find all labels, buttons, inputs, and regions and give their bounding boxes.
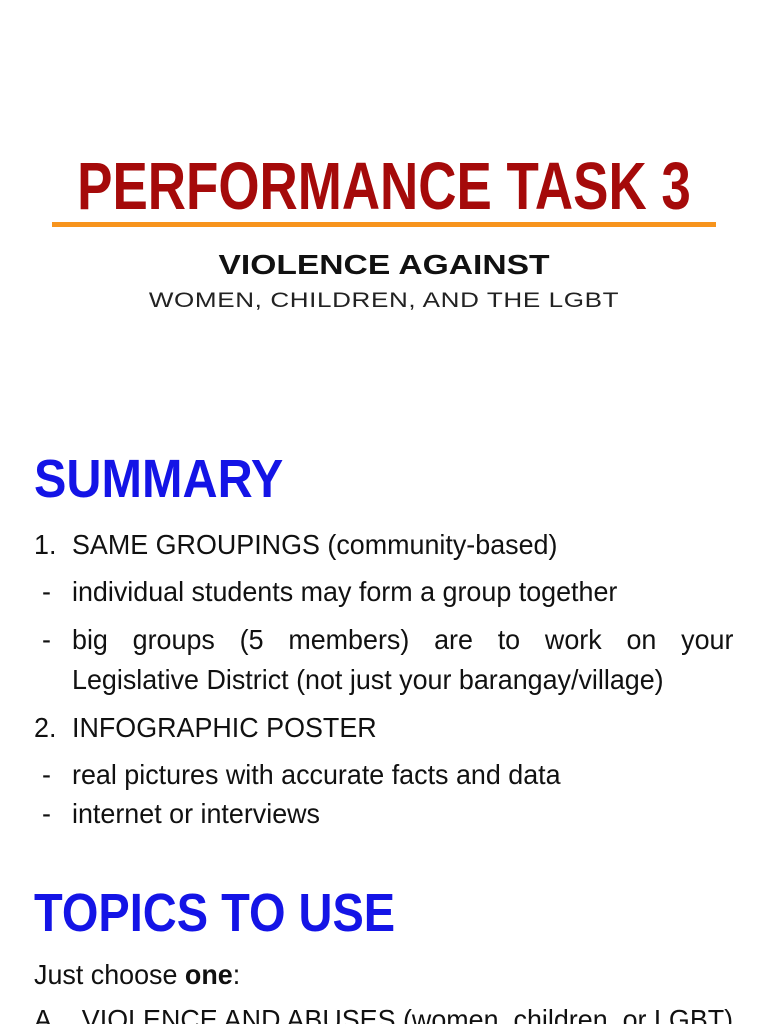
summary list: 2. (34, 712, 56, 743)
summary list: Legislative District (not just your barangay/village) (72, 664, 664, 695)
summary list (34, 529, 733, 829)
summary list: (5 (240, 624, 264, 655)
summary list: individual students may form a group together (72, 576, 617, 607)
subtitle: VIOLENCE AGAINST (218, 249, 550, 280)
heading: topics to use: TOPICS TO USE (34, 883, 395, 943)
summary list: your (681, 624, 733, 655)
summary list: - (42, 759, 51, 790)
summary list: internet or interviews (72, 798, 320, 829)
summary list: to (498, 624, 520, 655)
topics text (34, 959, 733, 1024)
summary list: - (42, 624, 51, 655)
summary list: groups (133, 624, 215, 655)
summary list: are (434, 624, 473, 655)
summary list: - (42, 798, 51, 829)
summary list: on (626, 624, 656, 655)
topics text: Just choose one: (34, 959, 240, 990)
summary list: work (545, 624, 602, 655)
summary list: INFOGRAPHIC POSTER (72, 712, 377, 743)
summary list: members) (288, 624, 409, 655)
summary list: 1. (34, 529, 56, 560)
summary list: SAME GROUPINGS (community-based) (72, 529, 557, 560)
title: PERFORMANCE TASK 3 (77, 149, 691, 224)
subtitle (149, 249, 619, 312)
orange underline (52, 222, 716, 227)
subtitle: WOMEN, CHILDREN, AND THE LGBT (149, 289, 619, 312)
summary list: real pictures with accurate facts and data (72, 759, 561, 790)
summary list: - (42, 576, 51, 607)
heading: summary: SUMMARY (34, 449, 283, 509)
summary list: big (72, 624, 108, 655)
